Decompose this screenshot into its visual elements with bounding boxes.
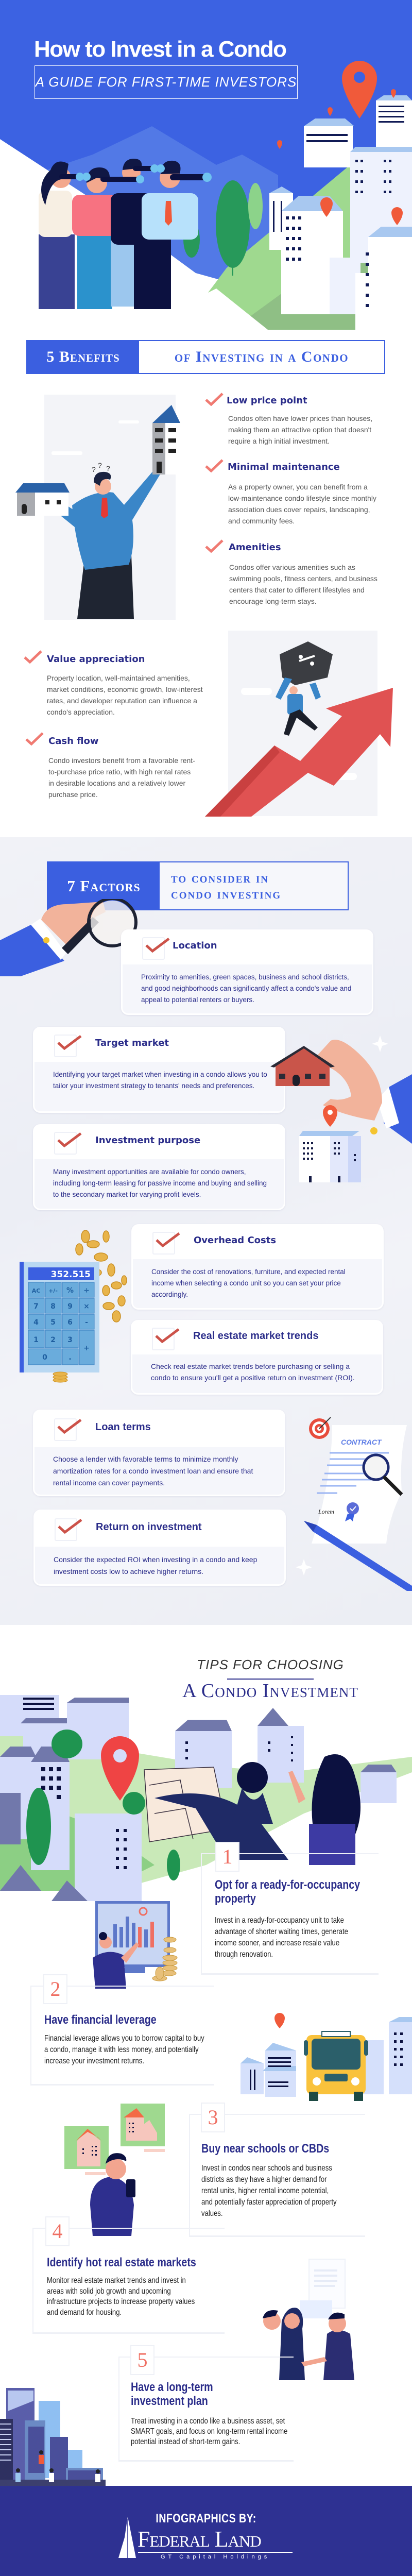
factor card: loan terms: Loan terms bbox=[95, 1421, 151, 1433]
illustration: calculator and coins: 1 bbox=[33, 1336, 39, 1344]
footer: infographics by: INFOGRAPHICS BY: bbox=[156, 2512, 256, 2526]
factor card: location: Location bbox=[173, 940, 217, 951]
tip 5: long-term plan: Treat investing in a condo like a business asset, set SMART goals, and focus on long-term rental income potential instead of short-term gains. bbox=[131, 2417, 287, 2446]
factor card: location bbox=[121, 929, 373, 1015]
factor card: investment purpose: Investment purpose bbox=[95, 1135, 200, 1146]
illustration: calculator and coins: 0 bbox=[42, 1353, 47, 1362]
illustration: city and couple with map bbox=[0, 1695, 412, 1901]
illustration: school bus and buildings bbox=[241, 2013, 412, 2101]
factor card: real estate market trends: Check real estate market trends before purchasing or selling a condo to ensure you'll get a positive return on investment (ROI). bbox=[151, 1362, 355, 1382]
illustration: calculator and coins: % bbox=[66, 1286, 74, 1295]
tip 1: ready-for-occupancy: Invest in a ready-for-occupancy unit to take advantage of shorter waiting times, generate income sooner, and increase resale value through renovation. bbox=[215, 1916, 348, 1959]
factor card: target market: Target market bbox=[95, 1038, 169, 1048]
title: How to Invest in a Condo bbox=[34, 37, 286, 62]
tip 4: hot real estate markets bbox=[32, 2216, 225, 2334]
factor card: investment purpose: Many investment opportunities are available for condo owners, including long-term leasing for passive income and buying and selling to the secondary market for varying profit levels. bbox=[53, 1168, 267, 1198]
tips heading: TIPS FOR CHOOSING bbox=[197, 1657, 344, 1672]
footer: federal land logo bbox=[118, 2517, 293, 2560]
heading: 7 factors: to consider in bbox=[171, 870, 269, 885]
factor card: investment purpose bbox=[33, 1124, 285, 1210]
illustration: city street with pedestrians bbox=[0, 2388, 106, 2486]
benefit: amenities bbox=[205, 539, 377, 605]
illustration: calculator and coins bbox=[20, 1230, 127, 1383]
illustration: building with pin bbox=[299, 1105, 361, 1182]
illustration: calculator and coins: - bbox=[85, 1318, 88, 1327]
illustration: calculator and coins: 352.515 bbox=[51, 1269, 91, 1280]
factor card: overhead costs: Consider the cost of renovations, furniture, and expected rental income when selecting a condo unit so you can set your price accordingly. bbox=[151, 1268, 346, 1298]
factors section background bbox=[0, 837, 412, 1625]
tip 2: financial leverage: Financial leverage allows you to borrow capital to buy a condo, manage it with less money, and potentially increase your investment returns. bbox=[44, 2034, 204, 2065]
illustration: calculator and coins: 6 bbox=[67, 1318, 73, 1327]
illustration: calculator and coins: AC bbox=[32, 1287, 40, 1294]
tip 3: near schools or CBDs: Buy near schools or CBDs bbox=[201, 2142, 329, 2156]
illustration: contract with pen: Lorem bbox=[318, 1508, 334, 1515]
heading: 5 benefits bbox=[26, 340, 385, 374]
illustration: calculator and coins: 2 bbox=[50, 1336, 56, 1344]
subtitle box bbox=[35, 65, 298, 99]
illustration: calculator and coins: 8 bbox=[50, 1302, 56, 1311]
heading: 5 benefits: of Investing in a Condo bbox=[175, 348, 349, 365]
benefit: minimal maintenance: As a property owner, you can benefit from a low-maintenance condo lifestyle since monthly association dues cover repairs, landscaping, and community fees. bbox=[228, 483, 376, 525]
illustration: man weighing house vs condo: ? bbox=[98, 461, 102, 469]
benefit: value appreciation: Value appreciation bbox=[47, 654, 145, 665]
illustration: calculator and coins: 3 bbox=[67, 1336, 73, 1344]
benefit: amenities: Condos offer various amenities such as swimming pools, fitness centers, and business centers that cater to different lifestyles and encourage long-term stays. bbox=[229, 563, 377, 605]
benefit: low price point: Low price point bbox=[227, 395, 307, 406]
tip 5: long-term plan: investment plan bbox=[131, 2394, 208, 2408]
factor card: target market bbox=[33, 1027, 285, 1113]
illustration: man weighing house vs condo: ? bbox=[106, 464, 110, 472]
illustration: man weighing house vs condo bbox=[15, 395, 180, 620]
footer: federal land logo: Federal Land bbox=[138, 2527, 261, 2552]
illustration: man carrying percent on rising arrow bbox=[205, 631, 393, 817]
factor card: real estate market trends: Real estate market trends bbox=[193, 1330, 318, 1342]
illustration: man browsing listings on phone bbox=[64, 2104, 165, 2236]
illustration: hand holding house bbox=[270, 1036, 412, 1144]
tip 4: hot real estate markets: Monitor real estate market trends and invest in areas with solid job growth and upcoming infrastructure projects to increase property values and demand for housing. bbox=[47, 2276, 195, 2316]
illustration: hand with magnifier bbox=[0, 899, 138, 976]
illustration: calculator and coins: + bbox=[83, 1344, 90, 1352]
tip 5: long-term plan bbox=[118, 2345, 294, 2462]
benefit: low price point bbox=[205, 393, 372, 445]
tips heading: A Condo Investment bbox=[182, 1680, 358, 1702]
heading: 7 factors: 7 Factors bbox=[67, 877, 141, 894]
factor card: loan terms bbox=[33, 1410, 285, 1496]
illustration: calculator and coins: ÷ bbox=[83, 1286, 90, 1295]
hero illustration bbox=[0, 0, 412, 330]
benefit: cash flow: Condo investors benefit from a favorable rent-to-purchase price ratio, with high rental rates in desirable locations and a relatively lower purchase price. bbox=[48, 756, 195, 799]
benefit: minimal maintenance bbox=[205, 459, 376, 525]
heading: 7 factors bbox=[47, 861, 349, 910]
benefit: minimal maintenance: Minimal maintenance bbox=[228, 462, 340, 472]
tip 3: near schools or CBDs bbox=[189, 2103, 365, 2237]
tips heading bbox=[182, 1657, 358, 1702]
factor card: real estate market trends bbox=[131, 1320, 383, 1395]
illustration: man weighing house vs condo: ? bbox=[92, 465, 96, 473]
illustration: calculator and coins: 9 bbox=[67, 1302, 73, 1311]
illustration: calculator and coins: 4 bbox=[33, 1318, 39, 1327]
tip 2: financial leverage bbox=[30, 1974, 214, 2086]
tip 4: hot real estate markets: 4 bbox=[53, 2219, 63, 2243]
factor card: return on investment: Return on investment bbox=[96, 1521, 202, 1533]
illustration: contract with pen: CONTRACT bbox=[341, 1438, 382, 1446]
illustration: woman with chart and coins bbox=[93, 1901, 177, 1989]
tip 1: ready-for-occupancy bbox=[201, 1842, 379, 1975]
tip 1: ready-for-occupancy: 1 bbox=[222, 1845, 233, 1868]
factor card: return on investment: Consider the expected ROI when investing in a condo and keep investment costs low to achieve higher returns. bbox=[54, 1555, 257, 1575]
benefit: cash flow bbox=[25, 732, 195, 799]
footer: federal land logo: GT Capital Holdings bbox=[161, 2554, 270, 2560]
illustration: calculator and coins: . bbox=[68, 1353, 72, 1362]
tip 1: ready-for-occupancy: Opt for a ready-for-occupancy property bbox=[215, 1878, 360, 1906]
illustration: calculator and coins: +/- bbox=[48, 1287, 58, 1294]
illustration: calculator and coins: × bbox=[83, 1302, 90, 1311]
tip 2: financial leverage: Have financial leverage bbox=[44, 2013, 157, 2027]
tip 5: long-term plan: Have a long-term bbox=[131, 2380, 213, 2394]
benefit: cash flow: Cash flow bbox=[48, 736, 99, 747]
tip 5: long-term plan: 5 bbox=[137, 2348, 147, 2371]
factor card: location: Proximity to amenities, green spaces, business and school districts, and good neighborhoods can significantly affect a condo's value and appeal to potential renters or buyers. bbox=[141, 973, 351, 1004]
illustration: calculator and coins: 5 bbox=[50, 1318, 56, 1327]
footer bbox=[0, 2486, 412, 2576]
illustration: calculator and coins: 7 bbox=[33, 1302, 39, 1311]
illustration: handshake deal bbox=[263, 2259, 354, 2380]
factor card: loan terms: Choose a lender with favorable terms to minimize monthly amortization rates for a condo investment loan and ensure that rental income can cover payments. bbox=[53, 1455, 253, 1487]
benefit: amenities: Amenities bbox=[229, 542, 281, 553]
tip 2: financial leverage: 2 bbox=[50, 1977, 61, 2001]
illustration: contract with pen bbox=[296, 1417, 412, 1591]
factor card: overhead costs: Overhead Costs bbox=[194, 1235, 276, 1246]
factor card: target market: Identifying your target market when investing in a condo allows you to tailor your investment strategy to tenants' needs and preferences. bbox=[53, 1071, 267, 1090]
heading: 7 factors: condo investing bbox=[171, 886, 281, 902]
factor card: return on investment bbox=[33, 1510, 286, 1586]
factor card: overhead costs bbox=[131, 1224, 384, 1310]
tip 3: near schools or CBDs: Invest in condos near schools and business districts as they have a higher demand for rental units, higher rental income potential, and potentially faster appreciation of property values. bbox=[201, 2164, 337, 2218]
benefit: value appreciation: Property location, well-maintained amenities, market conditions, economic growth, low-interest rates, and developer reputation can influence a condo's appreciation. bbox=[47, 674, 203, 716]
subtitle box: A GUIDE FOR FIRST-TIME INVESTORS bbox=[36, 74, 297, 90]
benefit: value appreciation bbox=[24, 650, 203, 716]
benefit: low price point: Condos often have lower prices than houses, making them an attractive option that doesn't require a high initial investment. bbox=[228, 414, 372, 445]
tip 4: hot real estate markets: Identify hot real estate markets bbox=[47, 2256, 196, 2269]
heading: 5 benefits: 5 Benefits bbox=[46, 348, 120, 365]
tip 3: near schools or CBDs: 3 bbox=[208, 2106, 218, 2129]
